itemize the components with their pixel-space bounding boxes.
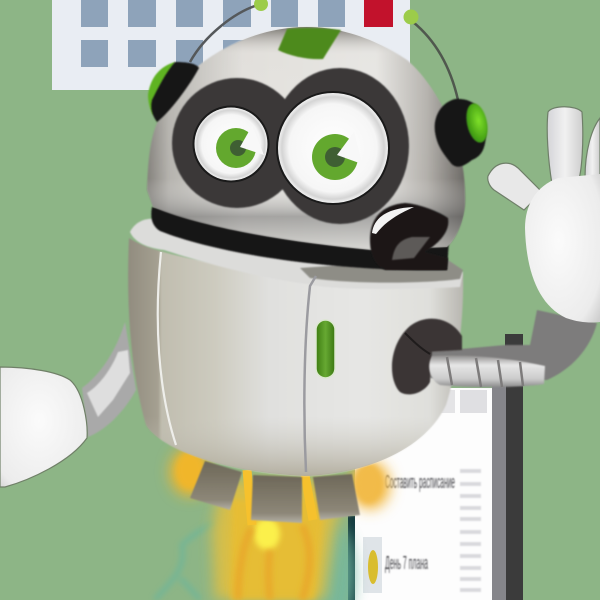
teal glow beside flame (315, 525, 355, 600)
right antenna (404, 10, 458, 100)
cyan energy sparks (155, 522, 214, 600)
body collar (130, 219, 463, 289)
right ear (435, 99, 491, 167)
tablet: Составить расписание (385, 472, 455, 492)
left ear (148, 62, 199, 122)
head (147, 0, 491, 270)
tablet: День 7 плана (385, 553, 428, 573)
tablet (348, 334, 523, 600)
shoulder socket (392, 319, 462, 394)
tablet thumbnail icon (363, 537, 382, 593)
thruster fins (190, 461, 360, 523)
body seam lines (158, 252, 176, 445)
right glove (488, 107, 600, 323)
green top patch (278, 28, 341, 59)
right eye (276, 91, 390, 205)
right iris (312, 132, 362, 180)
left glove (0, 367, 87, 487)
goggle frames (172, 68, 409, 224)
black neck band (151, 207, 449, 270)
body (128, 219, 463, 476)
left antenna (190, 0, 268, 62)
left arm (0, 322, 136, 487)
calendar on the wall (52, 0, 410, 90)
left iris (216, 126, 264, 168)
body LED (316, 320, 335, 378)
upper arm shadow (428, 310, 597, 380)
rocket flame (170, 448, 390, 600)
arm segments (429, 355, 545, 387)
right arm (392, 107, 600, 394)
dome (147, 27, 465, 250)
calendar highlighted day (364, 0, 393, 27)
left eye (192, 106, 270, 182)
mouth (370, 203, 448, 270)
tablet list of entries (460, 469, 481, 592)
